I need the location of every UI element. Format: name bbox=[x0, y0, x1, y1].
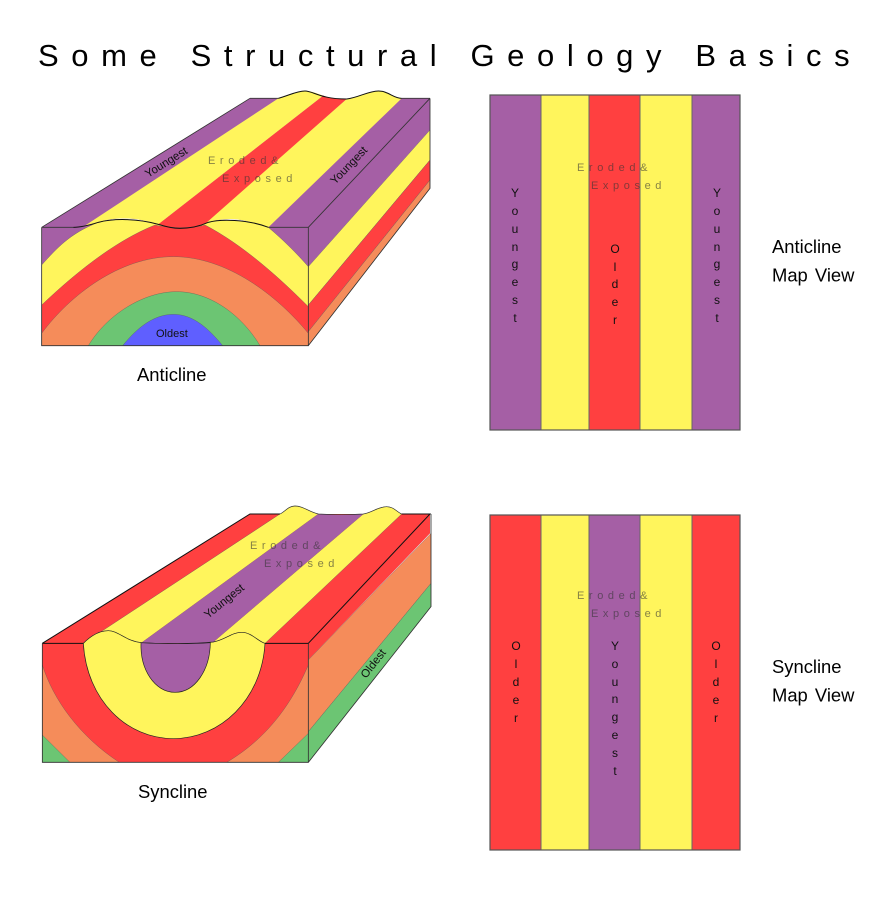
label: eroded and exposed on syncline: Eroded& bbox=[250, 540, 325, 552]
anticline map labels: Exposed bbox=[591, 180, 666, 192]
label: eroded and exposed on anticline bbox=[208, 155, 297, 185]
right face layers bbox=[308, 514, 431, 762]
syncline map labels: Eroded& bbox=[577, 590, 652, 602]
label: youngest on anticline right: Youngest bbox=[329, 144, 371, 187]
caption: anticline map view: Anticline bbox=[772, 236, 842, 257]
syncline map view bbox=[490, 515, 740, 850]
caption: anticline: Anticline bbox=[137, 364, 207, 385]
caption: syncline map view: Syncline bbox=[772, 656, 842, 677]
label: oldest on syncline: Oldest bbox=[359, 647, 389, 681]
anticline map labels bbox=[511, 162, 721, 327]
syncline map labels: Older bbox=[511, 639, 521, 725]
block outlines bbox=[42, 506, 431, 762]
syncline map labels: Exposed bbox=[591, 608, 666, 620]
block outlines bbox=[42, 91, 430, 346]
anticline map labels: Eroded& bbox=[577, 162, 652, 174]
title: Some Structural Geology Basics bbox=[38, 38, 862, 73]
anticline map labels: Older bbox=[610, 242, 620, 327]
anticline block diagram bbox=[42, 91, 430, 346]
syncline block diagram bbox=[42, 506, 431, 762]
caption: syncline: Syncline bbox=[138, 781, 208, 802]
front face layers bbox=[42, 220, 308, 346]
caption: anticline map view bbox=[772, 236, 855, 286]
anticline map view bbox=[490, 95, 740, 430]
label: oldest on anticline: Oldest bbox=[156, 328, 188, 340]
top surface bbox=[42, 91, 430, 228]
label: youngest on syncline: Youngest bbox=[202, 582, 247, 621]
label: eroded and exposed on anticline: Exposed bbox=[222, 173, 297, 185]
syncline map labels: Youngest bbox=[611, 639, 619, 778]
right face layers bbox=[308, 98, 430, 346]
label: youngest on anticline left: Youngest bbox=[143, 145, 191, 181]
label: eroded and exposed on anticline: Eroded& bbox=[208, 155, 283, 167]
front face layers bbox=[42, 631, 308, 762]
caption: syncline map view bbox=[772, 656, 855, 706]
anticline map labels: Youngest bbox=[713, 186, 721, 325]
syncline map labels bbox=[511, 590, 721, 778]
label: eroded and exposed on syncline: Exposed bbox=[264, 558, 339, 570]
label: eroded and exposed on syncline bbox=[250, 540, 339, 570]
caption: anticline map view: Map View bbox=[772, 264, 855, 286]
syncline map labels: Older bbox=[711, 639, 721, 725]
top surface bbox=[42, 506, 430, 644]
caption: syncline map view: Map View bbox=[772, 684, 855, 706]
anticline map labels: Youngest bbox=[511, 186, 519, 325]
